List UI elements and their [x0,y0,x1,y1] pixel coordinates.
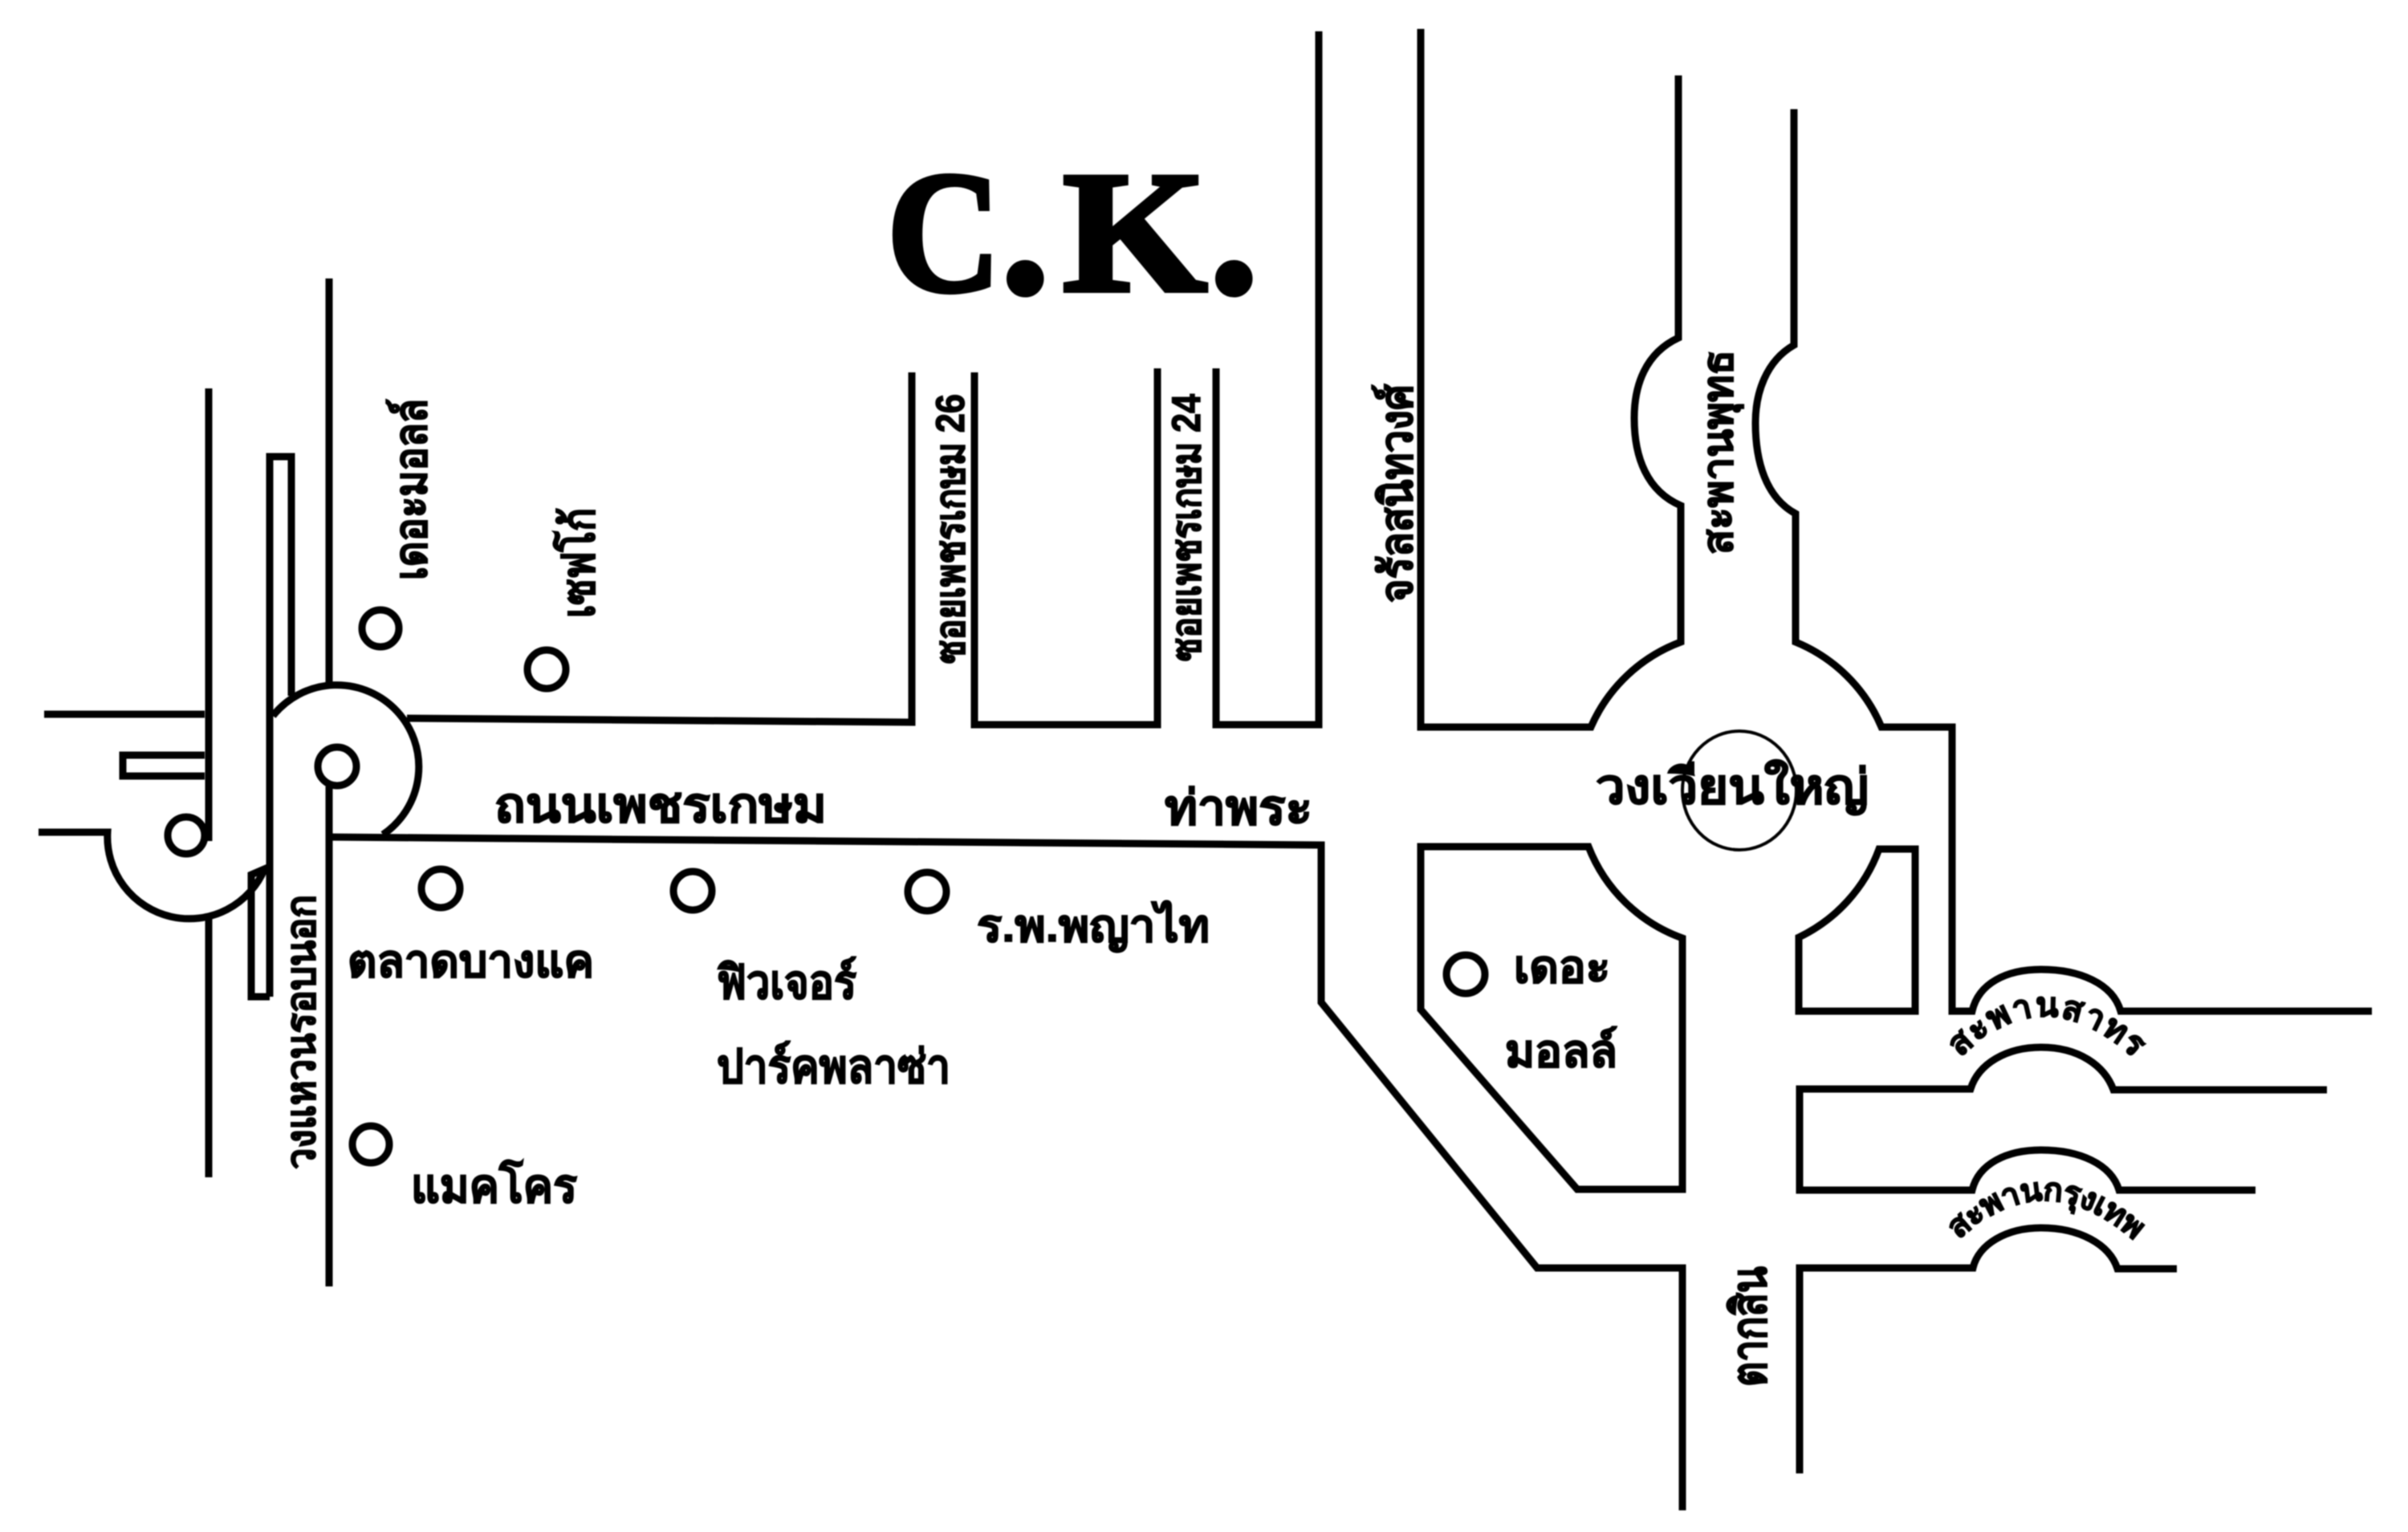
label: Future Park Plaza line 1: ฟิวเจอร์ [717,956,856,1009]
title: C.K.: . [1000,114,1050,336]
label: Soi Phetkasem 26: ซอยเพชรเกษม 26 [928,394,973,664]
label: Taksin: ตากสิน [1723,1266,1776,1387]
label: Krung Thep bridge, curved: สะพานกรุงเทพ [1948,1180,2146,1241]
label: Future Park Plaza line 2: ปาร์คพลาซ่า [717,1040,950,1093]
label: Save-Co, rotated: เซฟโก้ [552,508,604,618]
title: C.K.: K [1063,136,1207,328]
title: C.K. [887,114,1259,336]
label: Wongwian Yai: วงเวียนใหญ่ [1596,759,1869,815]
label: Makro: แมคโคร [411,1158,577,1213]
label: Outer Ring Road, rotated: วงแหวนรอบนอก [279,895,323,1169]
road network: left interchange [39,278,419,1286]
title: C.K.: . [1209,114,1259,336]
label: Soi Phetkasem 24: ซอยเพชรเกษม 24 [1164,394,1209,661]
label: The Mall, rotated: เดอะมอลล์ [385,399,436,580]
road network: Wongwian Yai roundabout and bridges [1421,29,2372,1473]
label: Sathorn bridge, curved: สะพานสาทร [1949,995,2148,1056]
label: The Mall line 1: เดอะ [1514,941,1610,992]
location markers [168,610,1485,1163]
label: Memorial Bridge: สะพานพุทธ [1695,350,1744,555]
label: Charansanitwong: จรัลสนิทวงศ์ [1371,384,1422,603]
roundabout centre circle [1682,731,1796,850]
title: C.K.: C [887,136,1001,328]
label: The Mall line 2: มอลล์ [1505,1026,1617,1076]
label: Bang Khae market: ตลาดบางแค [348,936,594,986]
label: Tha Phra: ท่าพระ [1165,781,1312,835]
road network: Phetkasem road and sois [329,31,1682,1510]
label: Phyathai hospital: ร.พ.พญาไท [977,900,1210,953]
label: Phetkasem road: ถนนเพชรเกษม [494,778,827,832]
